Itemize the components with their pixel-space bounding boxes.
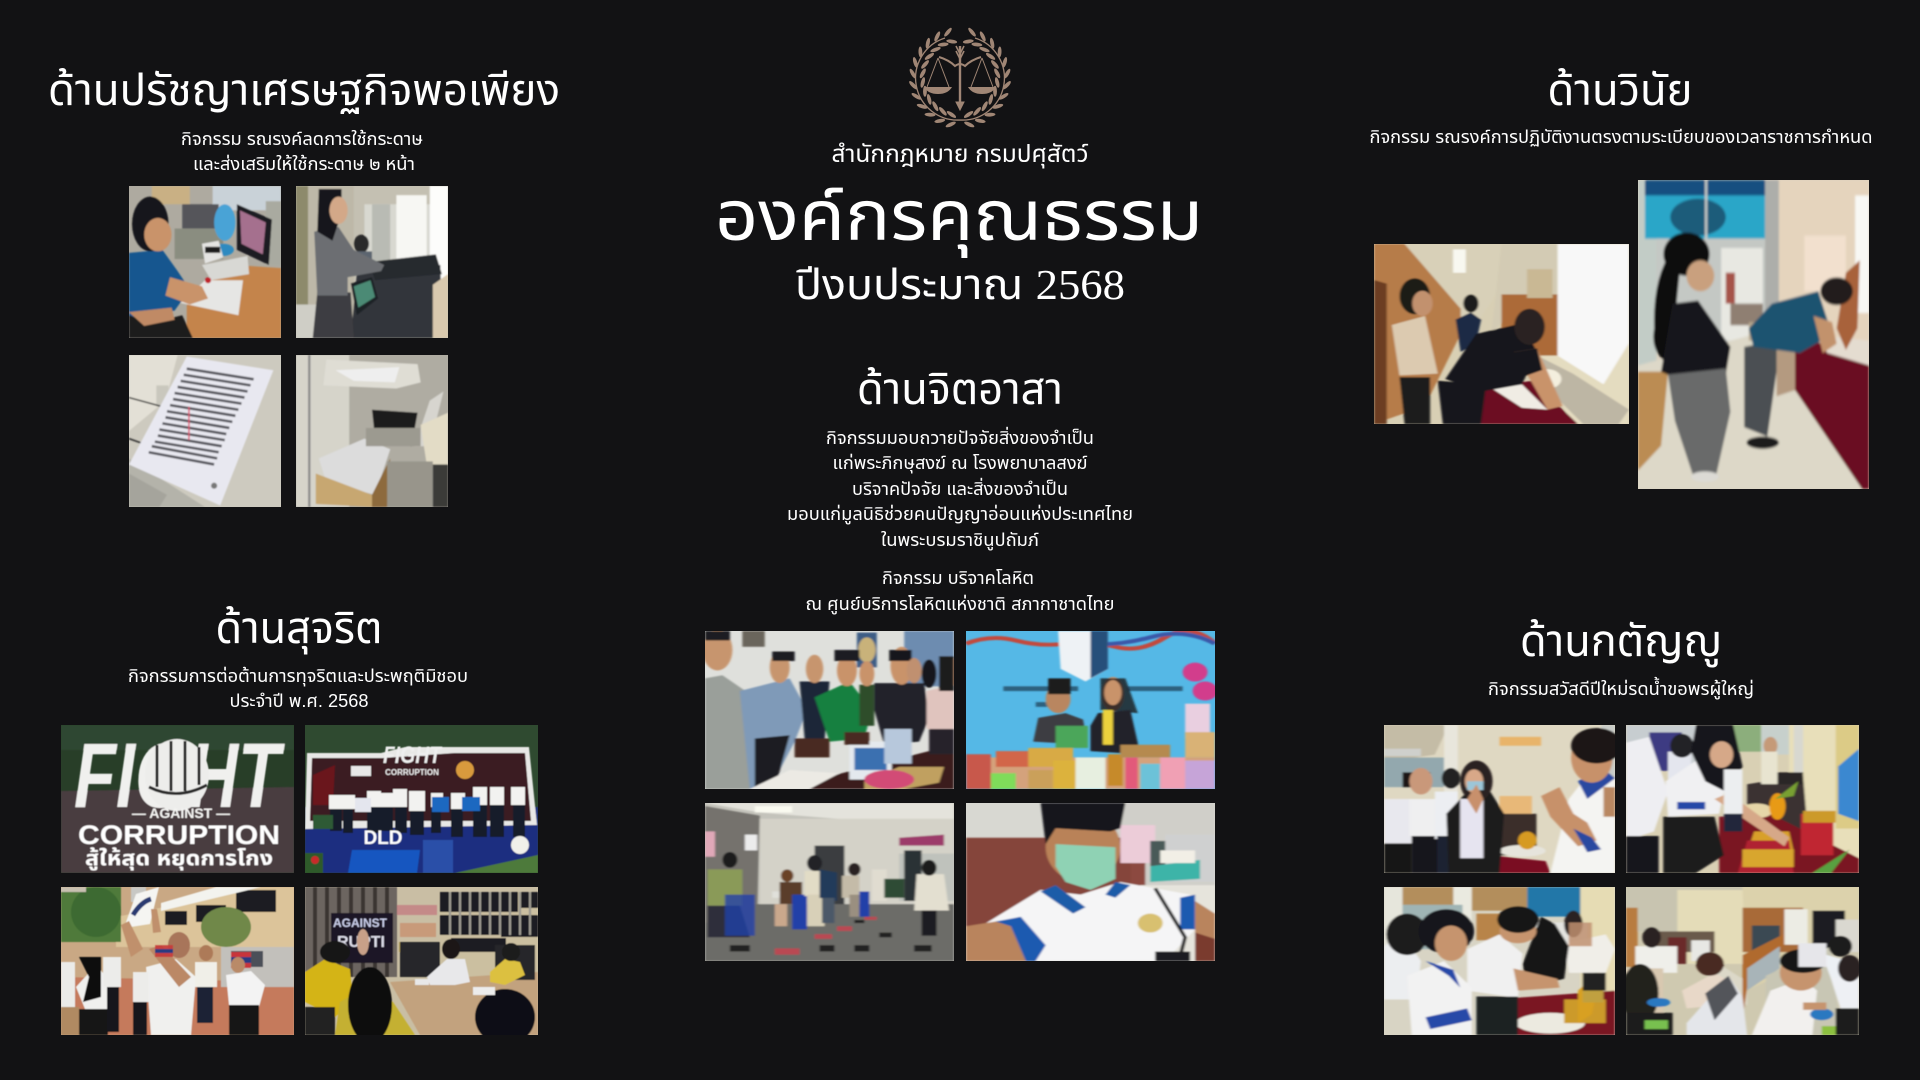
text: paper reduction activity bbox=[181, 129, 423, 174]
photo: paper box by copier bbox=[296, 355, 448, 507]
photo: fight against corruption sign: สู้ให้สุด หยุดการโกง bbox=[85, 848, 273, 870]
heading: gratitude: ด้านกตัญญู bbox=[1520, 617, 1722, 668]
text: donation activities: ในพระบรมราชินูปถัมภ์ bbox=[881, 530, 1039, 552]
text: donation activities: ณ ศูนย์บริการโลหิตแห่งชาติ สภากาชาดไทย bbox=[806, 594, 1114, 616]
photo: fight against corruption sign: CORRUPTION bbox=[78, 820, 280, 850]
photo: anti-corruption parade bbox=[61, 887, 294, 1035]
text: donation activities: บริจาคปัจจัย และสิ่งของจำเป็น bbox=[852, 477, 1068, 499]
photo: woman at copier bbox=[296, 186, 448, 338]
photo: group in front of sign bbox=[305, 725, 538, 873]
panel: gratitude bbox=[1384, 617, 1861, 1035]
title: องค์กรคุณธรรม bbox=[715, 177, 1203, 258]
text: anti-corruption activity: ประจำปี พ.ศ. 2568 bbox=[230, 691, 368, 711]
text: anti-corruption activity bbox=[128, 666, 468, 711]
photo: signing attendance bbox=[1638, 180, 1869, 489]
photo: blood donation room bbox=[705, 803, 954, 961]
text: donation activities: มอบแก่มูลนิธิช่วยคนปัญญาอ่อนแห่งประเทศไทย bbox=[787, 504, 1133, 526]
icon: scales of justice emblem bbox=[907, 26, 1013, 129]
text: donation activities bbox=[787, 426, 1133, 616]
photo: meeting room: AGAINST bbox=[333, 916, 388, 930]
text: office name: สำนักกฎหมาย กรมปศุสัตว์ bbox=[832, 141, 1089, 169]
photo: meeting room bbox=[305, 887, 538, 1035]
text: donation activities: กิจกรรมมอบถวายปัจจัยสิ่งของจำเป็น bbox=[826, 426, 1094, 448]
text: new year water pouring activity: กิจกรรมสวัสดีปีใหม่รดน้ำขอพรผู้ใหญ่ bbox=[1488, 676, 1754, 701]
text: discipline activity: กิจกรรม รณรงค์การปฏิบัติงานตรงตามระเบียบของเวลาราชการกำหนด bbox=[1370, 127, 1872, 147]
photo: blessing with water bowl bbox=[1384, 887, 1615, 1035]
photo: wai to senior bbox=[1384, 725, 1615, 873]
photo: blood donor selfie bbox=[966, 803, 1215, 961]
photo: fight against corruption sign: — AGAINST — bbox=[132, 805, 230, 821]
photo: group in front of sign: DLD bbox=[363, 828, 403, 849]
photo: seniors blessing staff bbox=[1626, 887, 1859, 1035]
photo: group in front of sign: CORRUPTION bbox=[385, 768, 439, 777]
panel: logo and title bbox=[715, 26, 1203, 309]
photo: printed page bbox=[129, 355, 281, 507]
subtitle: fiscal year: ปีงบประมาณ 2568 bbox=[795, 261, 1125, 309]
heading: volunteer: ด้านจิตอาสา bbox=[857, 365, 1063, 414]
panel: discipline bbox=[1370, 66, 1872, 489]
photo: foundation donation bbox=[966, 631, 1215, 789]
heading: sufficiency economy: ด้านปรัชญาเศรษฐกิจพอเพียง bbox=[48, 66, 560, 115]
heading: discipline: ด้านวินัย bbox=[1548, 66, 1692, 115]
photo: meeting room: RUPTI bbox=[337, 934, 385, 951]
text: paper reduction activity: กิจกรรม รณรงค์ลดการใช้กระดาษ bbox=[181, 129, 423, 149]
panel: volunteer bbox=[703, 365, 1217, 961]
photo: pouring water at altar bbox=[1626, 725, 1859, 873]
text: donation activities: กิจกรรม บริจาคโลหิต bbox=[882, 568, 1034, 588]
panel: honesty bbox=[61, 604, 538, 1045]
heading: honesty: ด้านสุจริต bbox=[216, 604, 382, 655]
photo: group with donations bbox=[705, 631, 954, 789]
panel: sufficiency economy bbox=[48, 66, 560, 507]
text: anti-corruption activity: กิจกรรมการต่อต้านการทุจริตและประพฤติมิชอบ bbox=[128, 666, 468, 687]
text: paper reduction activity: และส่งเสริมให้ใช้กระดาษ ๒ หน้า bbox=[193, 154, 415, 174]
photo: group in front of sign: FIGHT bbox=[383, 742, 443, 769]
text: donation activities: แก่พระภิกษุสงฆ์ ณ โรงพยาบาลสงฆ์ bbox=[832, 453, 1088, 474]
photo: signing in corridor bbox=[1374, 244, 1629, 424]
photo: fight against corruption sign bbox=[61, 725, 294, 873]
photo: woman at desk bbox=[129, 186, 281, 338]
